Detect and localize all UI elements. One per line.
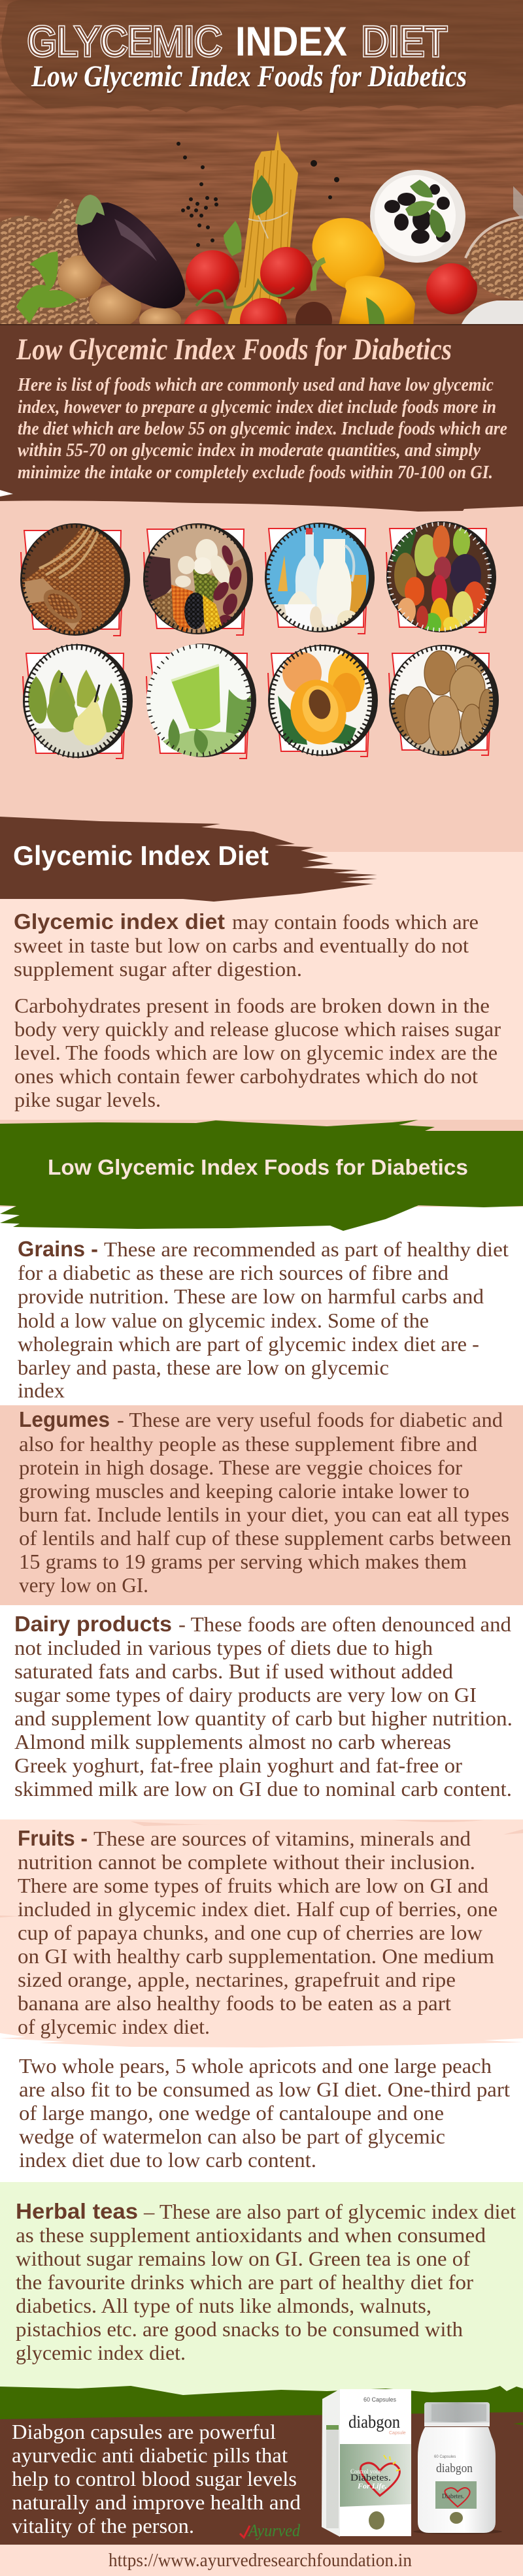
leaves [16,252,77,323]
macaroni pile [0,199,98,325]
text block: pears and apricots: wedge of watermelon can also be part of glycemic [19,2125,445,2148]
text block: grains [18,1237,509,1402]
text block: carbohydrates [14,994,501,1111]
text block: legumes: Legumes [19,1407,110,1431]
text block: dairy products: Dairy products [14,1612,172,1636]
text block: fruits: These are sources of vitamins, minerals and [93,1827,471,1850]
text block: herbal teas: Herbal teas [16,2199,138,2223]
photo: grains [20,523,131,637]
text block: fruits [18,1826,498,2038]
intro paragraph: within 55-70 on glycemic index in moderate quantities, and simply [18,440,481,461]
title: Glycemic Index Diet: GLYCEMIC [27,19,222,65]
footer url: https://www.ayurvedresearchfoundation.in [109,2551,412,2571]
text block: glycemic index diet definition: sweet in taste but low on carbs and eventually do not [14,934,469,957]
text block: pears and apricots [19,2054,510,2172]
product: diabgon box: Diabetes. [350,2473,391,2483]
text block: glycemic index diet definition [14,909,479,981]
title: Glycemic Index Diet: GLYCEMIC [27,19,222,65]
text block: herbal teas [16,2199,516,2364]
promo text: Diabgon capsules are powerful [12,2420,276,2443]
text block: dairy products: Greek yoghurt, fat-free plain yoghurt and fat-free or [14,1753,462,1777]
onions [58,255,102,299]
text block: carbohydrates: pike sugar levels. [14,1088,161,1111]
white section behind grains [0,1207,523,1405]
text block: fruits: banana are also healthy foods to be eaten as a part [18,1991,451,2015]
text block: dairy products: sugar some types of dairy products are very low on GI [14,1683,477,1706]
photo: fruits [386,519,497,637]
text block: fruits: sized orange, apple, nectarines, grapefruit and ripe [18,1968,456,1991]
text block: legumes: - These are very useful foods for diabetic and [117,1408,503,1431]
title: Glycemic Index Diet [27,19,447,65]
text block: glycemic index diet definition: Glycemic index diet [14,909,225,934]
text block: legumes: growing muscles and keeping calorie intake lower to [19,1479,469,1503]
text block: grains: for a diabetic as these are rich sources of fibre and [18,1261,448,1284]
photo: green tea [144,644,256,761]
heading brush: Glycemic Index Diet: Glycemic Index Diet [13,840,269,871]
photo: pears [20,644,133,761]
promo text: naturally and improve health and [12,2490,301,2514]
text block: legumes: of lentils and half cup of these supplement carbs between [19,1526,511,1550]
text block: fruits: There are some types of fruits which are low on GI and [18,1874,488,1897]
logo: Ayurved: Ayurved [247,2521,301,2540]
green brush strip [0,2386,523,2425]
text block: carbohydrates: ones which contain fewer carbohydrates which do not [14,1064,478,1088]
product: diabgon bottle: 60 Capsules [434,2455,456,2459]
intro paragraph [17,374,507,483]
product: diabgon box: 60 Capsules [363,2396,397,2403]
text block: dairy products [14,1612,513,1801]
heading band: Low Glycemic Index Foods for Diabetics: Low Glycemic Index Foods for Diabetics [48,1155,468,1179]
heading brush: Glycemic Index Diet [0,817,377,902]
product: diabgon box: Control your [350,2468,380,2475]
text block: grains: provide nutrition. These are low on harmful carbs and [18,1284,484,1308]
text block: dairy products: not included in various types of diets due to high [14,1636,433,1659]
product: diabgon bottle: diabgon [436,2462,473,2475]
text block: herbal teas: glycemic index diet. [16,2341,186,2364]
text block: carbohydrates: body very quickly and release glucose which raises sugar [14,1017,501,1041]
spaghetti bundle [224,131,298,325]
photo: apricots [268,644,379,758]
promo text: ayurvedic anti diabetic pills that [12,2443,288,2467]
text block: glycemic index diet definition: supplement sugar after digestion. [14,957,302,981]
text block: fruits: of glycemic index diet. [18,2015,210,2038]
glass jar with macaroni [461,186,523,325]
text block: pears and apricots: Two whole pears, 5 whole apricots and one large peach [19,2054,492,2078]
product: diabgon box [322,2389,411,2537]
promo text: help to control blood sugar levels [12,2467,297,2490]
text block: fruits: included in glycemic index diet. Half cup of berries, one [18,1897,498,1921]
plate with olives [370,170,465,263]
text block: legumes: also for healthy people as these supplement fibre and [19,1432,477,1456]
hero photo: wood table with vegetables [0,0,523,352]
text block: herbal teas: the favourite drinks which are part of healthy diet for [16,2270,473,2294]
text block: dairy products: and supplement low quantity of carb but higher nutrition. [14,1706,513,1730]
peppercorns [177,142,339,247]
text block: legumes [19,1407,511,1597]
text block: grains: hold a low value on glycemic index. Some of the [18,1309,429,1332]
product: diabgon box: Capsule [389,2431,406,2436]
eggplant [75,195,185,308]
text block: dairy products: - These foods are often denounced and [178,1612,511,1636]
promo text [12,2420,301,2537]
product: diabgon box: For Life. [357,2481,387,2490]
text block: pears and apricots: index diet due to low carb content. [19,2148,316,2172]
panel: fruits background [0,1819,523,2047]
darker title overlay with scalloped edge [1,0,523,112]
text block: grains: wholegrain which are part of glycemic index diet are - [18,1332,479,1356]
photo: walnuts [389,644,500,758]
text block: legumes: protein in high dosage. These are veggie choices for [19,1456,462,1479]
text block: carbohydrates: Carbohydrates present in foods are broken down in the [14,994,490,1017]
intro heading: Low Glycemic Index Foods for Diabetics [16,333,452,367]
text block: fruits: nutrition cannot be complete without their inclusion. [18,1850,475,1874]
text block: grains: index [18,1378,65,1402]
text block: herbal teas: diabetics. All type of nuts like almonds, walnuts, [16,2294,431,2317]
promo text: vitality of the person. [12,2514,194,2537]
panel: intro brown brush [0,325,523,512]
text block: herbal teas: pistachios etc. are good snacks to be consumed with [16,2317,463,2341]
text block: grains: barley and pasta, these are low on glycemic [18,1356,389,1379]
product: diabgon box: diabgon [348,2412,400,2432]
text block: pears and apricots: of large mango, one wedge of cantaloupe and one [19,2101,444,2125]
text block: legumes: very low on GI. [19,1573,148,1597]
panel: product promo [0,2412,523,2545]
text block: pears and apricots: are also fit to be consumed as low GI diet. One-third part [19,2078,510,2101]
yellow peppers [312,218,415,325]
text block: legumes: burn fat. Include lentils in your diet, you can eat all types [19,1503,509,1526]
text block: herbal teas: as these supplement antioxidants and when consumed [16,2223,486,2247]
title: Glycemic Index Diet: DIET [362,19,447,65]
product: diabgon bottle [413,2402,502,2534]
photo: legumes [143,523,253,637]
text block: glycemic index diet definition: may contain foods which are [232,910,479,934]
text block: legumes: 15 grams to 19 grams per serving which makes them [19,1550,467,1573]
text block: fruits: on GI with healthy carb supplementation. One medium [18,1944,494,1968]
product: diabgon bottle: Diabetes. [442,2493,464,2500]
title: Glycemic Index Diet: INDEX [235,19,347,65]
photo: dairy [265,523,376,637]
title: Glycemic Index Diet: DIET [362,19,447,65]
text block: carbohydrates: level. The foods which are low on glycemic index are the [14,1041,498,1064]
heading band: Low Glycemic Index Foods for Diabetics [0,1120,523,1231]
text block: grains: These are recommended as part of healthy diet [104,1237,509,1261]
tomatoes [184,247,477,324]
text block: dairy products: saturated fats and carbs. But if used without added [14,1659,453,1683]
text block: grains: Grains - [18,1237,98,1261]
text block: dairy products: skimmed milk are low on GI due to nominal carb content. [14,1777,512,1801]
text block: dairy products: Almond milk supplements almost no carb whereas [14,1730,451,1753]
text block: fruits: Fruits - [18,1826,88,1850]
text block: herbal teas: – These are also part of glycemic index diet [143,2200,516,2223]
text block: herbal teas: without sugar remains low on GI. Green tea is one of [16,2247,470,2270]
text block: fruits: cup of papaya chunks, and one cup of cherries are low [18,1921,482,1944]
